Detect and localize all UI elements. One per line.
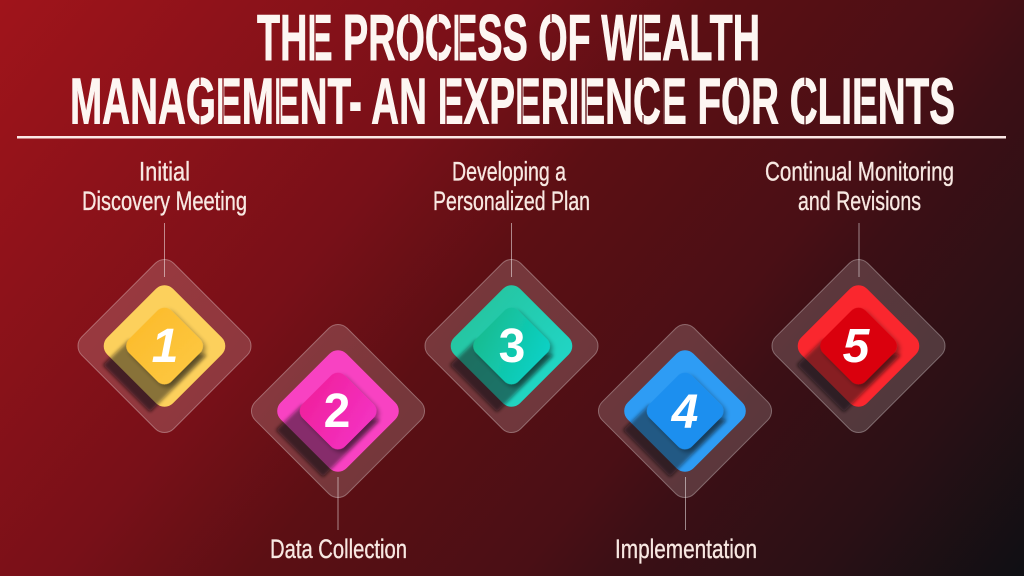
middle diamond 3 [446,280,577,412]
outer diamond 5 [767,254,950,438]
title [70,1,955,138]
connector 5 [858,223,860,277]
shadow base 4 [623,405,727,477]
label 2: Data Collection [270,534,407,564]
step 5: continual monitoring and revisions [765,156,954,438]
inner diamond 4 [643,369,727,453]
outer diamond 1 [73,254,256,438]
connector 1 [164,223,166,277]
outer diamond 4 [593,319,777,503]
label 3: Personalized Plan [433,186,590,216]
cast shadow 3 [450,340,554,412]
label 1 [82,156,247,216]
label 3: Developing a [452,156,567,186]
number 3: 3 [499,320,525,373]
label 4: Implementation [615,534,757,564]
step 3: developing a personalized plan [420,156,603,438]
cast shadow 4 [623,405,727,477]
label 1: Initial [139,156,190,186]
number 5: 5 [843,320,871,373]
label 5: Continual Monitoring [765,156,954,186]
cast shadow 1 [103,340,207,412]
middle diamond 1 [99,280,230,412]
label 3 [433,156,590,216]
middle diamond 2 [272,345,404,477]
step 4: implementation [593,319,777,564]
number 2: 2 [324,385,350,438]
middle diamond 4 [619,345,751,477]
connector 2 [337,477,339,530]
label 1: Discovery Meeting [82,186,247,216]
connector 4 [684,477,686,530]
connector 3 [510,223,512,277]
middle diamond 5 [793,280,924,412]
inner diamond 5 [816,304,901,388]
outer diamond 3 [420,254,603,438]
outer diamond 2 [246,319,430,503]
number 1: 1 [152,320,178,373]
cast shadow 5 [797,340,901,412]
shadow base 2 [276,405,380,477]
shadow base 3 [450,340,554,412]
inner diamond 1 [122,304,207,388]
step 2: data collection [246,319,430,564]
inner diamond 3 [469,304,554,388]
shadow base 1 [103,340,207,412]
number 4: 4 [671,386,698,439]
cast shadow 2 [276,405,380,477]
label 5 [765,156,954,216]
label 5: and Revisions [798,186,921,216]
inner diamond 2 [296,369,380,453]
shadow base 5 [797,340,901,412]
step 1: initial discovery meeting [73,156,256,438]
